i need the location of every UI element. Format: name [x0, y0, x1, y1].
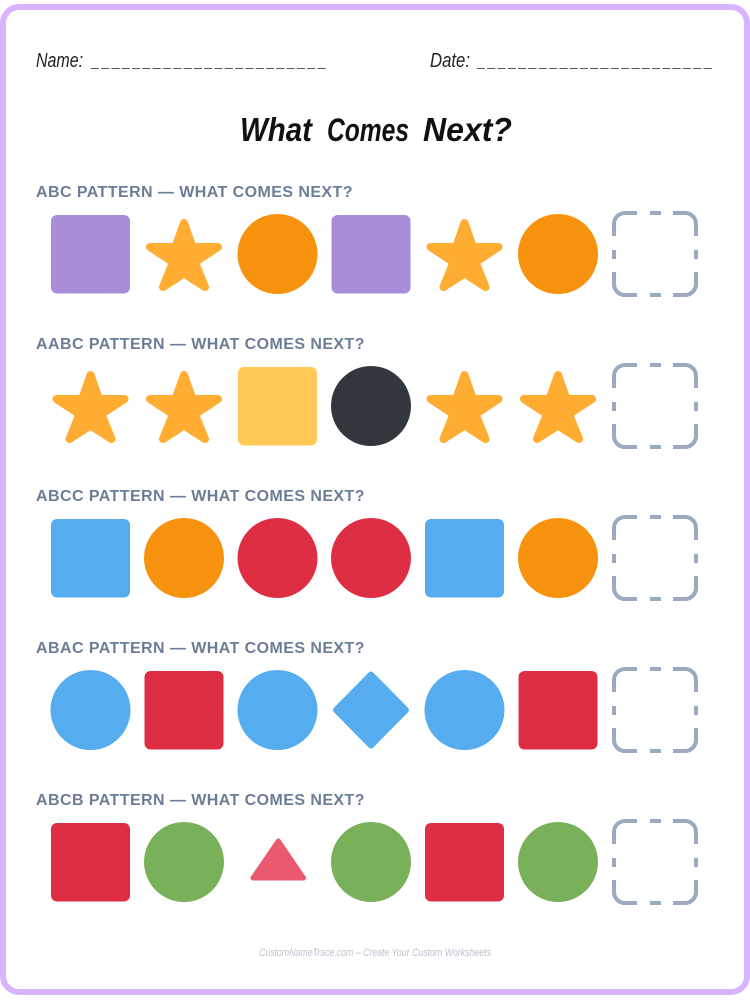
row 5 answer box	[614, 821, 696, 903]
pattern row 3: ABCC	[36, 488, 696, 599]
row 2 heading: AABC PATTERN — WHAT COMES NEXT?	[36, 336, 364, 353]
row 3 answer box	[614, 517, 696, 599]
date field: _______________________	[476, 53, 712, 69]
row 3 heading: ABCC PATTERN — WHAT COMES NEXT?	[36, 488, 364, 505]
row 3 shapes	[51, 518, 598, 598]
pattern row 5: ABCB	[36, 792, 696, 903]
row 1 answer box	[614, 213, 696, 295]
row 1 heading: ABC PATTERN — WHAT COMES NEXT?	[36, 184, 352, 201]
date field: Date:	[430, 50, 470, 72]
title: What	[240, 111, 314, 148]
title: Next?	[423, 111, 512, 148]
name field	[36, 50, 326, 72]
row 5 shapes	[51, 822, 598, 902]
date field	[430, 50, 712, 72]
row 4 heading: ABAC PATTERN — WHAT COMES NEXT?	[36, 640, 364, 657]
title	[240, 111, 512, 148]
pattern row 1: ABC	[36, 184, 696, 295]
pattern row 4: ABAC	[36, 640, 696, 751]
name field: Name:	[36, 50, 83, 72]
row 2 answer box	[614, 365, 696, 447]
pattern row 2: AABC	[36, 336, 696, 447]
footer: CustomNameTrace.com – Create Your Custom Worksheets	[259, 947, 491, 959]
row 4 answer box	[614, 669, 696, 751]
name field: _______________________	[90, 53, 326, 69]
row 4 shapes	[50, 670, 598, 750]
row 5 heading: ABCB PATTERN — WHAT COMES NEXT?	[36, 792, 364, 809]
row 1 shapes	[51, 214, 598, 294]
title: Comes	[327, 112, 409, 148]
row 2 shapes	[56, 366, 592, 446]
